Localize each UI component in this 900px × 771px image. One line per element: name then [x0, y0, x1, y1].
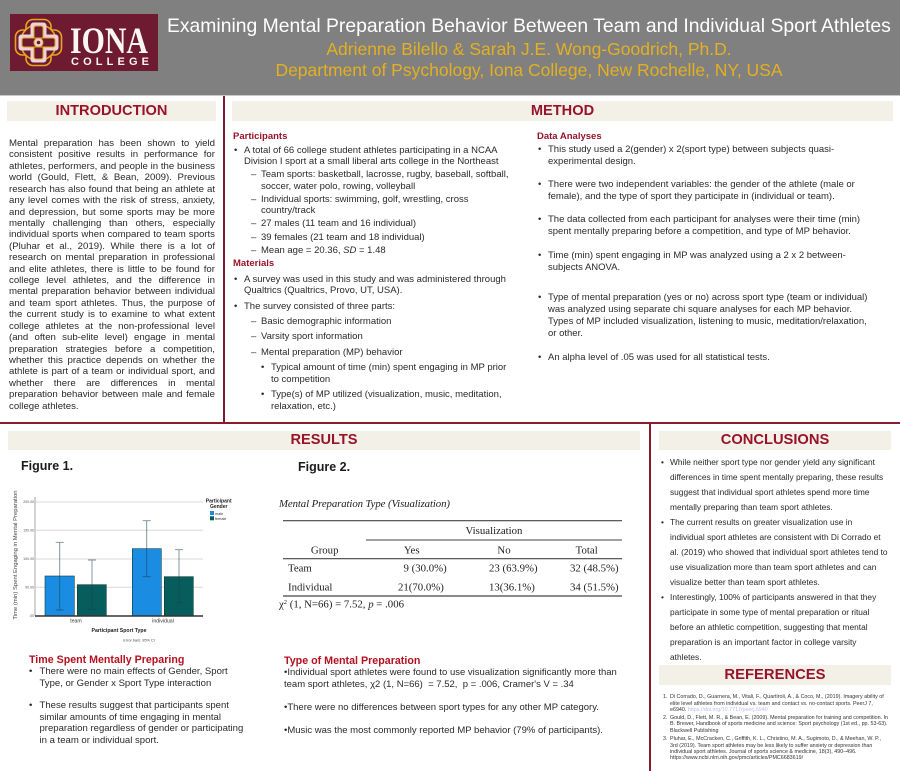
text: data analyses: experimental design. [548, 156, 636, 167]
text: data analyses: The data collected from each participant for analyses were their time (min) [548, 214, 860, 225]
text: references list: e6940. https://doi.org/10.7717/peerj.6940 [670, 706, 768, 712]
text: data analyses: female), and the type of sport they participate in (individual or team). [548, 191, 835, 202]
text: references list: Pluhar, E., McCracken, C., Griffith, K. L., Christino, M. A., Sugimoto, D., & Meehan, W. P., [670, 736, 881, 742]
table: visualization chi square: Yes [404, 544, 420, 556]
text: conclusions body: preparation is an important factor in college varsity [670, 637, 856, 647]
bar chart: time spent in mental preparation: 150.00 [23, 528, 34, 532]
text: participants and materials: Individual sports: swimming, golf, wrestling, cross [261, 194, 468, 205]
heading: conclusions [659, 431, 891, 450]
text: references list: Gould, D., Flett, M. R., & Bean, E. (2009). Mental preparation for training and competition. In [670, 714, 888, 720]
text: introduction body: (Pluhar et al., 2019). While there is a lot of [9, 241, 215, 252]
text: time spent mentally preparing [29, 654, 243, 746]
text: references list: 3rd (2019). Team sport athletes may be less likely to suffer anxiety or depression than [670, 742, 872, 748]
text: type of mental preparation: •There were no differences between sport types for any other MP category. [284, 702, 599, 713]
text: references list: 1. [663, 694, 667, 700]
text: participants and materials [233, 131, 508, 412]
legend: female [215, 517, 226, 521]
bar chart: time spent in mental preparation: individual [152, 618, 174, 624]
text: introduction body: (and often sub-elite level) engage in mental [9, 332, 215, 343]
text: participants and materials: Basic demographic information [261, 316, 391, 327]
text: data analyses: There were two independent variables: the gender of the athlete (male or [548, 179, 855, 190]
text: introduction body: college athletes at the non-professional level [9, 321, 215, 332]
divider: horizontal [0, 422, 900, 424]
text: introduction body: consistent positive results in performance for [9, 149, 215, 160]
heading: results [8, 431, 640, 450]
text: participants and materials: Team sports: basketball, lacrosse, rugby, baseball, softball, [261, 169, 508, 180]
heading: conclusions: CONCLUSIONS [721, 432, 829, 448]
text: conclusions body: Interestingly, 100% of participants answered in that they [670, 592, 876, 602]
table: visualization chi square: χ [279, 598, 284, 610]
text: introduction body: whether there are differences in mental [9, 378, 215, 389]
table: visualization chi square: 13(36.1%) [489, 582, 535, 594]
text: participants and materials: – [251, 218, 256, 229]
text: participants and materials: Materials [233, 258, 274, 269]
text: time spent mentally preparing: preparation regardless of gender or participating [40, 723, 243, 734]
table: visualization chi square: Visualization [466, 525, 523, 537]
table: visualization chi square: 21(70.0%) [398, 582, 444, 594]
text: participants and materials: Mental preparation (MP) behavior [261, 347, 403, 358]
text: conclusions body: athletes. [670, 652, 702, 662]
text: introduction body: mentally challenging than others, especially [9, 218, 215, 229]
bar chart: time spent in mental preparation: team [70, 618, 82, 624]
bar chart: time spent in mental preparation: 100.00 [23, 557, 34, 561]
panel: introduction [7, 101, 216, 412]
text: data analyses: Time (min) spent engaging in MP was analyzed using a 2 x 2 between- [548, 250, 846, 261]
text: participants and materials: – [251, 331, 256, 342]
text: participants and materials: Participants [233, 131, 287, 142]
text: conclusions body: suggest that individual sport athletes spend more time [670, 487, 869, 497]
panel: method [232, 101, 893, 412]
text: participants and materials: Typical amount of time (min) spent engaging in MP prior [271, 362, 506, 373]
text: data analyses: Type of mental preparation (yes or no) across sport type (team or individual) [548, 292, 867, 303]
text: participants and materials: 39 females (21 team and 18 individual) [261, 232, 425, 243]
table: visualization chi square: 9 (30.0%) [404, 562, 447, 574]
text: time spent mentally preparing: These results suggest that participants spent [40, 700, 229, 711]
divider: vertical results/conclusions [649, 423, 651, 771]
text: type of mental preparation: •Music was the most commonly reported MP behavior (79% of participants). [284, 725, 603, 736]
text: conclusions body: participate in some type of mental preparation or ritual [670, 607, 869, 617]
logo: Iona College: COLLEGE [71, 56, 149, 68]
text: introduction body: Mental preparation has been shown to yield [9, 138, 215, 149]
bars [45, 549, 193, 616]
heading: introduction: INTRODUCTION [56, 103, 167, 119]
text: participants and materials: – [251, 316, 256, 327]
panel: conclusions and references [659, 431, 891, 761]
text: participants and materials: Type(s) of MP utilized (visualization, music, meditation, [271, 389, 502, 400]
text: conclusions body: before an athletic competition, suggesting that mental [670, 622, 868, 632]
text: data analyses: subjects ANOVA. [548, 262, 620, 273]
bar chart: time spent in mental preparation: Error bars: 95% CI [123, 638, 155, 642]
text: participants and materials: – [251, 245, 256, 256]
text: conclusions body: differences in time spent mentally preparing, these results [670, 472, 883, 482]
text: conclusions body: While neither sport type nor gender yield any significant [670, 457, 875, 467]
text: participants and materials: • [261, 362, 264, 373]
text: participants and materials: 27 males (11 team and 16 individual) [261, 218, 416, 229]
text: introduction body: the current study is to examine to what extent [9, 309, 215, 320]
table: visualization chi square: Group [311, 544, 338, 556]
text: introduction body: and elite athletes, there is little to be found for [9, 264, 215, 275]
authors: Adrienne Bilello & Sarah J.E. Wong-Goodrich, Ph.D. [326, 39, 732, 59]
text: data analyses: Data Analyses [537, 131, 602, 142]
text: introduction body: and team sport athletes. Thus, the purpose of [9, 298, 215, 309]
text: conclusions body: use visualization more than team sport athletes and can [670, 562, 876, 572]
panel: results [8, 431, 640, 746]
text: participants and materials: relaxation, etc.) [271, 401, 336, 412]
heading: method: METHOD [531, 103, 594, 119]
text: data analyses: or other. [548, 328, 583, 339]
table: visualization chi square: Total [576, 544, 598, 556]
text: introduction body: preparation strategies before a competition, [9, 344, 215, 355]
text: participants and materials: A survey was used in this study and was administered through [244, 274, 506, 285]
bar chart: time spent in mental preparation: Participant Sport Type [92, 628, 147, 634]
legend [206, 498, 232, 521]
text: participants and materials: A total of 66 college student athletes participating in a NCAA [244, 145, 498, 156]
text: participants and materials: – [251, 194, 256, 205]
text: time spent mentally preparing: • [29, 700, 32, 711]
table: visualization chi square: Team [288, 562, 312, 574]
text: participants and materials: Division I sport at a small liberal arts college in the Northeast [244, 156, 499, 167]
legend: Participant [206, 498, 232, 504]
text: participants and materials: Mean age = 20.36, SD = 1.48 [261, 245, 386, 256]
text: time spent mentally preparing: There were no main effects of Gender, Sport [40, 666, 228, 677]
text: introduction body: research on mental preparation in professional [9, 252, 215, 263]
text: participants and materials: – [251, 169, 256, 180]
text: data analyses: • [538, 250, 541, 261]
text: data analyses: • [538, 179, 541, 190]
text: participants and materials: – [251, 232, 256, 243]
text: conclusions body: The current results on greater visualization use in [670, 517, 852, 527]
table: visualization chi square: 2 [284, 599, 287, 606]
heading: results: RESULTS [290, 432, 358, 448]
text: references list: Di Corrado, D., Guarnera, M., Vitali, F., Quartiroli, A., & Coco, M., (2019). Imagery ability of [670, 694, 884, 700]
table: visualization chi square [278, 498, 622, 610]
text: data analyses: Types of MP included visualization, listening to music, meditation/relaxation, [548, 316, 867, 327]
text: references list: B. Brewer, Handbook of sports medicine and science: Sport psychology (1st ed., pp. 53-63). [670, 721, 887, 727]
text: data analyses: spent mentally preparing before a competition, and type of MP behavior. [548, 226, 851, 237]
bar chart: time spent in mental preparation: 200.00 [23, 500, 34, 504]
text: references list: 3. [663, 736, 667, 742]
text: introduction body: college level athletes, and the difference in [9, 275, 215, 286]
table: visualization chi square: 32 (48.5%) [570, 562, 619, 574]
text: conclusions body [661, 457, 888, 662]
bar chart: time spent in mental preparation: .00 [29, 614, 34, 618]
text: participants and materials: • [234, 274, 237, 285]
text: time spent mentally preparing: Type, or Gender x Sport Type interaction [40, 678, 211, 689]
text: data analyses: • [538, 292, 541, 303]
text: references list: individual sport athletes. Journal of sports science & medicine, 18(3), 490–496. [670, 749, 857, 755]
logo: Iona College [10, 14, 158, 71]
text: introduction body: mental preparation behavior between individual [9, 286, 215, 297]
text: references list: Blackwell Publishing [670, 728, 718, 734]
text: introduction body [9, 138, 216, 412]
legend: male [215, 512, 223, 516]
heading: method [232, 101, 893, 121]
text: data analyses: was analyzed using separate chi square analyses for each MP behavior. [548, 304, 852, 315]
table: visualization chi square: p = .006 [368, 598, 404, 610]
bar chart: time spent in mental preparation: Time (min) Spent Engaging in Mental Preparation [13, 490, 19, 620]
text: introduction body: preparation behavior between male and female [9, 389, 215, 400]
affiliation: Department of Psychology, Iona College, New Rochelle, NY, USA [275, 60, 783, 80]
text: participants and materials: • [234, 145, 237, 156]
text: conclusions body: al. (2019) who showed that individual sport athletes tend to [670, 547, 888, 557]
title: Examining Mental Preparation Behavior Between Team and Individual Sport Athletes [167, 16, 891, 37]
text: participants and materials: soccer, water polo, rowing, volleyball [261, 181, 415, 192]
text: participants and materials: • [234, 301, 237, 312]
text: introduction body: athletes, performers, and people in the business [9, 161, 215, 172]
text: references list: 2. [663, 714, 667, 720]
text: references list: elite level athletes from individual vs. team and contact vs. no-contact sports. PeerJ 7, [670, 700, 873, 706]
heading: references: REFERENCES [724, 667, 826, 683]
text: conclusions body: • [661, 592, 664, 602]
text: data analyses: • [538, 352, 541, 363]
text: introduction body: whether this practice depends on whether the [9, 355, 215, 366]
text: introduction body: individual sports when compared to team sports [9, 229, 215, 240]
text: conclusions body: • [661, 457, 664, 467]
text: type of mental preparation: •Individual sport athletes were found to use visualization significantly more than [284, 667, 617, 678]
text: type of mental preparation: team sport athletes, χ2 (1, N=66) = 7.52, p = .006, Cramer's V = .34 [284, 679, 574, 690]
table: visualization chi square: Individual [288, 582, 332, 594]
text: introduction body: college athletes. [9, 401, 79, 412]
text: introduction body: and depression, but some sports may be more [9, 207, 215, 218]
text: time spent mentally preparing: Time Spent Mentally Preparing [29, 654, 184, 666]
text: introduction body: any level comes with the risk of stress, anxiety, [9, 195, 215, 206]
text: conclusions body: individual sport athletes are consistent with Di Corrado et [670, 532, 881, 542]
text: participants and materials: to competition [271, 374, 330, 385]
text: conclusions body: • [661, 517, 664, 527]
text: time spent mentally preparing: similar amounts of time engaging in mental [40, 712, 221, 723]
text: participants and materials: • [261, 389, 264, 400]
text: data analyses: An alpha level of .05 was used for all statistical tests. [548, 352, 770, 363]
text: type of mental preparation [284, 655, 617, 736]
text: data analyses [537, 131, 867, 363]
text: participants and materials: – [251, 347, 256, 358]
legend: Gender [210, 504, 228, 510]
text: conclusions body: mentally preparing than team sport athletes. [670, 502, 833, 512]
text: type of mental preparation: Type of Mental Preparation [284, 655, 420, 667]
text: conclusions body: visualize better than team sport athletes. [670, 577, 820, 587]
text: participants and materials: Qualtrics (Qualtrics, Provo, UT, USA). [244, 285, 402, 296]
text: participants and materials: The survey consisted of three parts: [244, 301, 395, 312]
divider: vertical intro/method [223, 96, 225, 423]
text: introduction body: athlete is part of a team or individual sport, and [9, 366, 215, 377]
text: introduction body: world (Gould, Flett, & Bean, 2009). Previous [9, 172, 215, 183]
text: data analyses: • [538, 214, 541, 225]
text: participants and materials: country/track [261, 205, 315, 216]
table: visualization chi square: 23 (63.9%) [489, 562, 538, 574]
text: participants and materials: Varsity sport information [261, 331, 363, 342]
text: time spent mentally preparing: • [29, 666, 32, 677]
bar chart: time spent in mental preparation [13, 490, 232, 642]
table: visualization chi square: Mental Preparation Type (Visualization) [278, 498, 450, 510]
heading: references [659, 665, 891, 685]
text: time spent mentally preparing: in a team or individual sport. [40, 735, 159, 746]
table: visualization chi square: 34 (51.5%) [570, 582, 619, 594]
text: data analyses: • [538, 144, 541, 155]
table: visualization chi square: (1, N=66) = 7.52, [287, 598, 368, 610]
text: introduction body: research has also found that being an athlete at [9, 184, 215, 195]
table: visualization chi square: No [497, 544, 511, 556]
text: references list: https://www.ncbi.nlm.nih.gov/pmc/articles/PMC6683619/ [670, 755, 803, 761]
header banner [0, 0, 900, 96]
error bars [56, 521, 183, 610]
bar chart: time spent in mental preparation: 50.00 [25, 586, 34, 590]
heading: introduction [7, 101, 216, 121]
heading: figure 1: Figure 1. [21, 459, 73, 473]
text: references list [663, 694, 888, 761]
heading: figure 2: Figure 2. [298, 460, 350, 474]
text: data analyses: This study used a 2(gender) x 2(sport type) between subjects quasi- [548, 144, 834, 155]
